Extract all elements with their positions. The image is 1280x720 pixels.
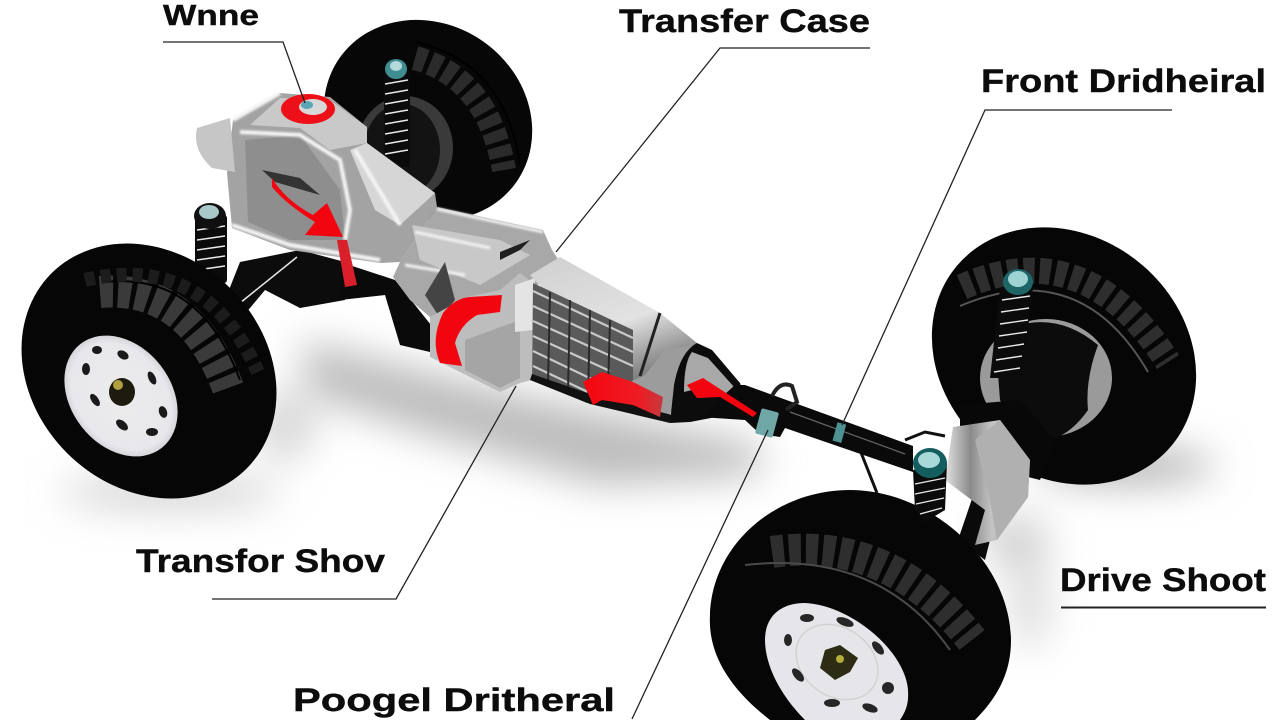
- rear housing: [227, 93, 437, 263]
- coil spring: front bottom: [913, 448, 947, 522]
- coil spring: right: [990, 269, 1033, 378]
- hub: [109, 378, 135, 406]
- ground shadows: [60, 340, 1215, 650]
- tail case: [530, 257, 697, 405]
- clamp: centre: [833, 422, 846, 443]
- grille lower edge: [530, 374, 672, 423]
- mid housing: [393, 207, 560, 317]
- side block: [430, 273, 533, 392]
- rim: [41, 313, 201, 479]
- wheel: rear top: [284, 0, 572, 261]
- coil spring: rear top: [384, 59, 410, 167]
- tread band: [772, 550, 972, 640]
- label: Drive Shoot: Drive Shoot: [1060, 562, 1266, 598]
- label: Transfer Case: Transfer Case: [619, 3, 870, 39]
- tail ring: [640, 313, 660, 376]
- rim: [765, 603, 908, 720]
- rear arrow: [272, 178, 343, 237]
- tread band: [415, 58, 504, 170]
- front suspension: [860, 400, 1055, 560]
- label: Wnne: Wnne: [163, 0, 259, 32]
- clamp: left: [755, 408, 779, 438]
- brake disc: [980, 319, 1112, 437]
- rear suspension and gearbox underside: [225, 250, 435, 352]
- finned grille: [532, 283, 633, 403]
- tail arrow: [687, 378, 757, 417]
- curved arrow: [436, 295, 502, 366]
- dark weld details: [262, 170, 320, 195]
- rear intake: [196, 118, 235, 172]
- wheel: bottom front: [710, 490, 1011, 720]
- hub: [820, 645, 858, 680]
- coil spring: left: [194, 203, 227, 283]
- label: Poogel Dritheral: Poogel Dritheral: [293, 682, 615, 718]
- red flow arrows: [272, 94, 757, 417]
- rear housing top plate: [250, 98, 367, 150]
- front differential: [945, 420, 1030, 545]
- label: Front Dridheiral: Front Dridheiral: [981, 63, 1266, 99]
- welded highlights: [232, 93, 400, 260]
- wheel: right rear: [880, 174, 1248, 538]
- cone window: [684, 352, 735, 396]
- drive shaft: [700, 384, 913, 472]
- transmission body: [196, 93, 745, 423]
- lower arrow: [583, 372, 663, 417]
- hub: [357, 96, 453, 200]
- tread band: [100, 292, 228, 388]
- bracket: [772, 384, 797, 410]
- tread band: [962, 271, 1168, 362]
- rear housing side shading: [245, 135, 345, 240]
- wheel: left: [0, 191, 329, 551]
- cone collar: [670, 343, 745, 423]
- label: Transfor Shov: Transfor Shov: [136, 543, 385, 579]
- red ring: [281, 94, 335, 124]
